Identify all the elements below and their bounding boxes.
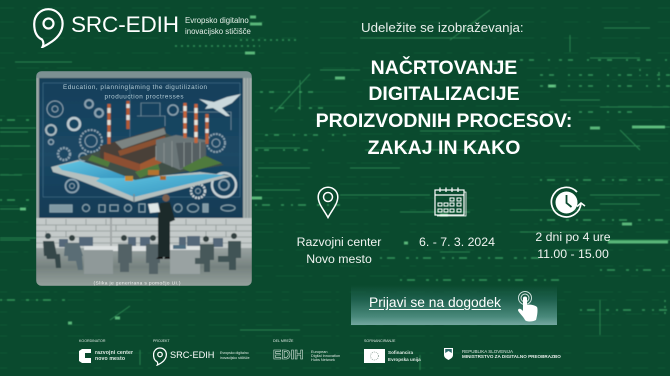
open book with water <box>51 160 232 202</box>
icon: tapping hand <box>518 291 538 322</box>
image heading text: Education, planninglaming the digutilization <box>63 84 207 91</box>
desks and monitors <box>59 236 223 274</box>
partner: EDIH network <box>273 338 340 362</box>
presenter <box>148 194 175 259</box>
text: duration: 11.00 - 15.00 <box>537 246 609 260</box>
partner: coordinator <box>79 339 133 363</box>
logo tagline: Evropsko digitalno <box>185 16 249 24</box>
partner: EDIH network: European <box>311 350 327 354</box>
illustration: training room with factory blueprint <box>36 71 252 286</box>
image heading text <box>63 84 207 100</box>
seated people <box>43 233 241 274</box>
title: PROIZVODNIH PROCESOV: <box>316 110 572 132</box>
title: NAČRTOVANJE <box>371 56 517 78</box>
brick wall <box>36 218 252 252</box>
factory <box>78 101 224 181</box>
partner: project SRC-EDIH: Evropsko digitalno <box>220 350 249 354</box>
image heading text: produuction proctresses <box>104 94 184 100</box>
partner: Republic of Slovenia ministry: MINISTRSTVO ZA DIGITALNO PREOBRAZBO <box>462 354 561 359</box>
title: DIGITALIZACIJE <box>368 83 520 105</box>
partner: EDIH network: DEL MREŽE <box>273 339 293 343</box>
partner: project SRC-EDIH: SRC-EDIH <box>170 350 214 360</box>
icon: clock with arrow <box>550 186 586 218</box>
chimneys <box>109 101 207 144</box>
partner: EU co-funding <box>364 339 421 363</box>
partner: EU co-funding: Evropska unija <box>388 356 421 362</box>
partner: project SRC-EDIH: PROJEKT <box>153 339 170 343</box>
partner: EU co-funding: SOFINANCIRANJE <box>364 339 395 343</box>
airplane <box>199 94 241 116</box>
partner: EDIH network: EDIH <box>273 348 304 362</box>
text: invitation: Udeležite se izobraževanja: <box>361 20 524 35</box>
blueprint board <box>36 71 252 223</box>
button: register <box>351 285 557 325</box>
text: location <box>297 234 382 266</box>
text: dates: 6. - 7. 3. 2024 <box>419 234 495 248</box>
partner: EU co-funding: Sofinancira <box>388 350 413 355</box>
partner: EDIH network: Hubs Network <box>311 358 335 362</box>
partner: project SRC-EDIH: inovacijsko stičišče <box>220 356 250 360</box>
floor <box>36 248 252 286</box>
title <box>316 56 572 159</box>
logo: SRC-EDIH header <box>33 8 251 48</box>
gears on blueprint <box>46 100 236 198</box>
icon: calendar <box>434 188 466 216</box>
logo tagline <box>185 16 251 36</box>
partner: EDIH network: Digital Innovation <box>311 354 340 358</box>
partner: coordinator: novo mesto <box>95 356 125 362</box>
logo wordmark: SRC-EDIH <box>71 12 179 36</box>
button label: Prijavi se na dogodek <box>369 295 501 310</box>
title: ZAKAJ IN KAKO <box>368 137 520 159</box>
icons row on blueprint <box>50 204 235 212</box>
logo tagline: inovacijsko stičišče <box>185 26 251 36</box>
text: duration <box>535 230 611 260</box>
text: location: Novo mesto <box>306 252 372 266</box>
partner: Republic of Slovenia ministry <box>444 348 561 360</box>
text: duration: 2 dni po 4 ure <box>535 230 611 244</box>
footer: partner logos <box>79 338 561 366</box>
partner: coordinator: KOORDINATOR <box>79 339 105 343</box>
partner: coordinator: razvojni center <box>95 350 133 356</box>
icon: location pin <box>317 186 339 219</box>
icon: location pin bubble <box>33 8 64 48</box>
text: location: Razvojni center <box>297 234 381 248</box>
partner: Republic of Slovenia ministry: REPUBLIKA SLOVENIJA <box>462 348 513 354</box>
partner: project SRC-EDIH <box>153 339 250 366</box>
